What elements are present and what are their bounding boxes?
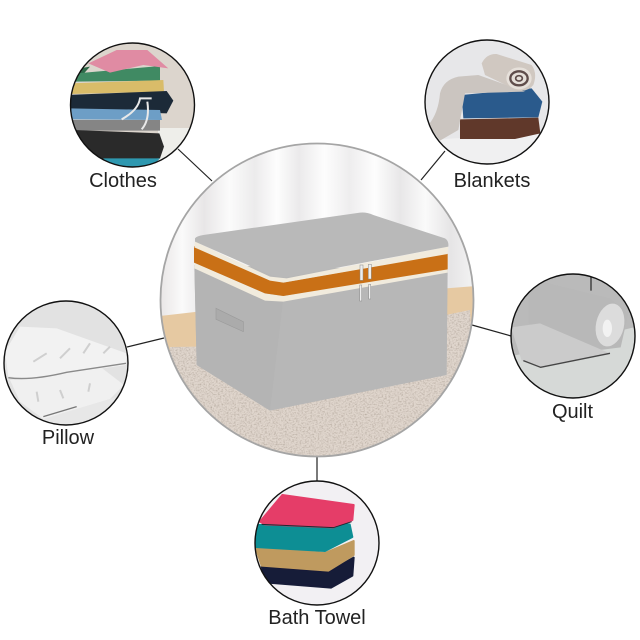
upper cream zipper trim (194, 242, 448, 283)
item: pillow (4, 301, 128, 449)
label: blankets: Blankets (454, 170, 530, 192)
item: quilt (510, 274, 637, 423)
side handle (216, 308, 243, 332)
rug (160, 310, 480, 460)
connector: quilt to box (472, 325, 511, 336)
connector: blankets to box (421, 151, 445, 180)
quilt photo (510, 274, 637, 400)
connector: clothes to box (178, 149, 212, 181)
bath towel ring (255, 481, 379, 605)
blankets ring (425, 40, 549, 164)
blankets photo (425, 40, 549, 167)
box body (194, 265, 448, 411)
label: clothes: Clothes (89, 170, 157, 192)
wooden floor (162, 286, 473, 350)
item: blankets (425, 40, 549, 192)
central photo ring (160, 144, 474, 456)
storage box (194, 213, 448, 411)
item: clothes (67, 43, 198, 192)
connector: pillow to box (127, 338, 164, 347)
zipper pulls (360, 264, 371, 301)
label: pillow: Pillow (42, 427, 95, 449)
bath towel photo (255, 481, 379, 605)
curtain backdrop (160, 140, 476, 320)
lower cream zipper trim (194, 263, 448, 302)
pillow ring (4, 301, 128, 425)
label: bath towel: Bath Towel (268, 607, 366, 629)
orange band (194, 246, 448, 296)
quilt ring (511, 274, 635, 398)
lid top (195, 212, 448, 268)
central photo: storage box in room (160, 140, 480, 460)
clothes photo (67, 43, 198, 168)
connector: bath towel to box (316, 457, 318, 482)
item: bath towel (255, 481, 379, 629)
pillow photo (4, 301, 128, 428)
clothes ring (70, 43, 194, 167)
label: quilt: Quilt (552, 401, 594, 423)
